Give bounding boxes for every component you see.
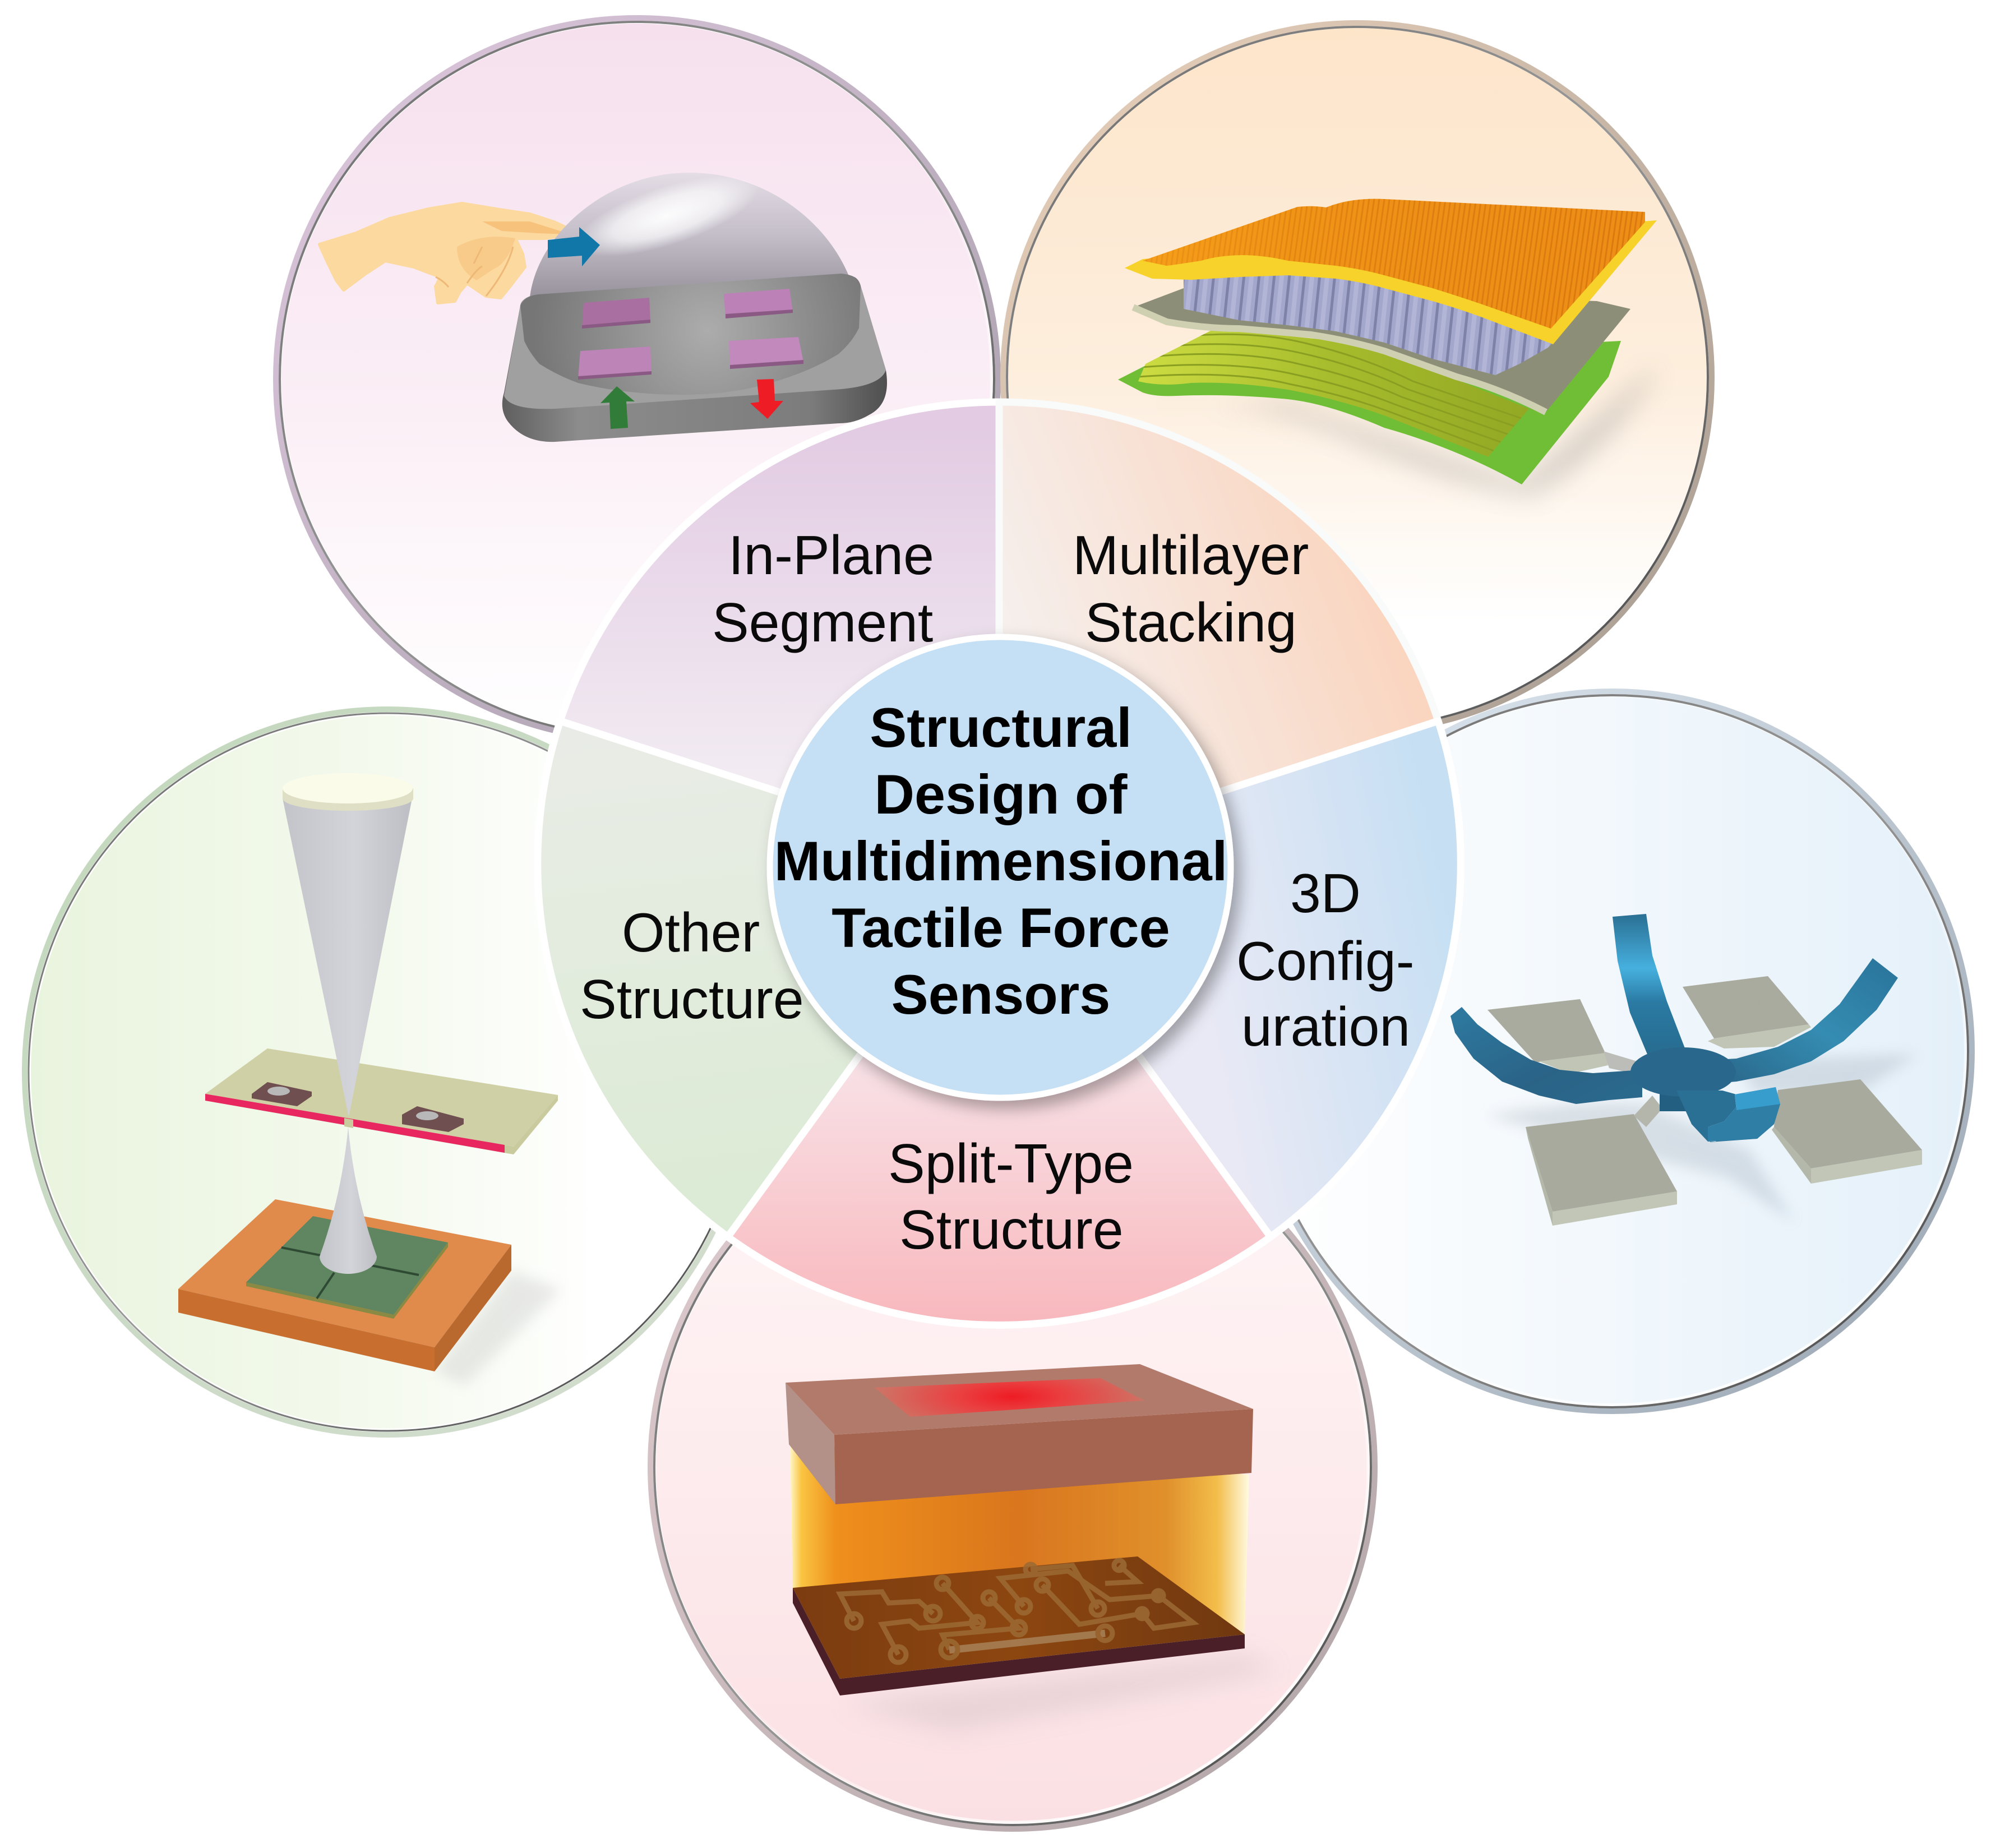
label: 3D Configuration xyxy=(1236,862,1415,1057)
circle background xyxy=(25,709,750,1435)
lower cone xyxy=(320,1127,377,1274)
title: Multidimensional xyxy=(774,830,1227,892)
icon: split-type block xyxy=(786,1364,1278,1732)
blue vertical arm xyxy=(1613,914,1685,1057)
label: Multilayer Stacking: Stacking xyxy=(1085,592,1297,653)
title: Design of xyxy=(874,763,1128,825)
label: Split-Type Structure: Split-Type xyxy=(888,1133,1134,1194)
label: Multilayer Stacking: Multilayer xyxy=(1073,524,1309,586)
label: Other Structure xyxy=(580,902,804,1030)
label: Multilayer Stacking xyxy=(1073,524,1309,653)
panel: split-type structure circle xyxy=(650,1105,1375,1829)
blue right arm xyxy=(1716,958,1898,1083)
sensing pads xyxy=(578,289,803,380)
segment: Multilayer Stacking xyxy=(999,402,1438,863)
panel: other structure circle xyxy=(25,709,750,1435)
icon: cone sensor xyxy=(178,773,561,1385)
circle background xyxy=(1252,691,1972,1411)
icon: 3D arched structure xyxy=(1450,914,1922,1226)
segment: Split-Type Structure xyxy=(728,863,1271,1325)
arrow: green up xyxy=(600,386,635,429)
title: Structural xyxy=(870,696,1132,759)
segment: Other Structure xyxy=(538,721,999,1237)
blue front arm xyxy=(1676,1087,1780,1142)
orange gel xyxy=(790,1444,1249,1637)
panel: multilayer stacking circle xyxy=(1003,23,1712,732)
label: Split-Type Structure: Structure xyxy=(899,1199,1124,1260)
label: In-Plane Segment: In-Plane xyxy=(728,524,934,586)
label: Other Structure: Structure xyxy=(580,968,804,1030)
label: 3D Configuration: Config- xyxy=(1236,930,1415,992)
center circle xyxy=(770,637,1231,1098)
icon: hand xyxy=(320,204,578,303)
middle plate xyxy=(205,1048,558,1154)
chart: five-segment wheel xyxy=(538,402,1461,1325)
title xyxy=(774,696,1227,1025)
circuit board xyxy=(793,1556,1245,1695)
title: Sensors xyxy=(891,963,1110,1025)
label: In-Plane Segment: Segment xyxy=(712,592,933,653)
blue hub xyxy=(1660,1085,1710,1111)
label: 3D Configuration: 3D xyxy=(1290,862,1361,924)
label: Split-Type Structure xyxy=(888,1133,1134,1260)
icon: dome sensor xyxy=(502,159,887,442)
label: Other Structure: Other xyxy=(622,902,760,963)
sensor chips xyxy=(252,1082,464,1132)
circle background xyxy=(276,18,998,740)
circle background xyxy=(1003,23,1712,732)
label: 3D Configuration: uration xyxy=(1241,996,1410,1057)
gray pads xyxy=(1488,976,1922,1226)
upper cone xyxy=(283,798,412,1117)
circle background xyxy=(650,1105,1375,1829)
heated contact area xyxy=(875,1378,1144,1417)
icon: layered sensor xyxy=(1118,199,1660,496)
arrow: blue shear force xyxy=(548,227,600,266)
panel: 3D configuration circle xyxy=(1252,691,1972,1411)
blue left arm xyxy=(1450,1007,1642,1104)
top block xyxy=(786,1364,1253,1504)
arrow: red down xyxy=(750,379,783,419)
green quadrant electrodes xyxy=(246,1216,448,1319)
orange base xyxy=(178,1199,511,1371)
title: Tactile Force xyxy=(831,897,1170,959)
panel: in-plane segment circle xyxy=(276,18,998,740)
segment: In-Plane Segment xyxy=(560,402,999,863)
circuit traces xyxy=(840,1560,1193,1662)
label: In-Plane Segment xyxy=(712,524,934,653)
top disc xyxy=(283,773,413,811)
segment: 3D Configuration xyxy=(999,721,1461,1237)
